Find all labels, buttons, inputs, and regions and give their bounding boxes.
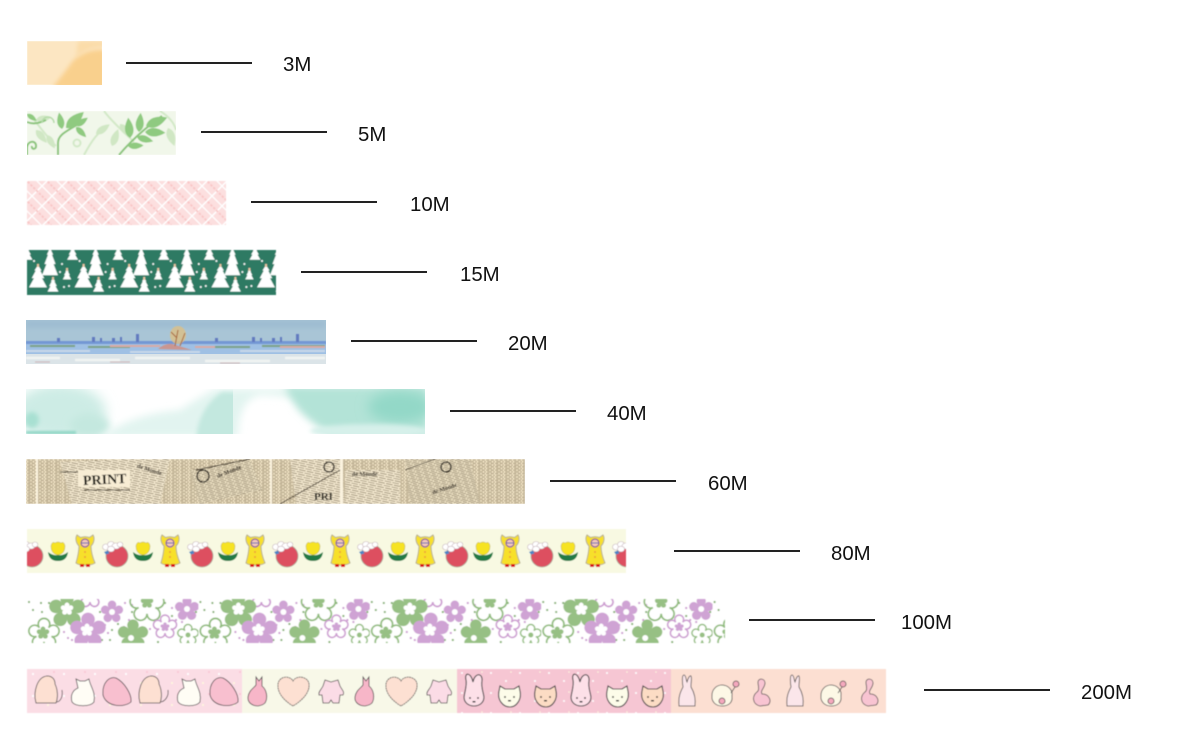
row: 100M (27, 599, 952, 643)
tape swatch: vintage newspaper (26, 459, 525, 504)
small headline: de Monde (216, 465, 242, 480)
small headline: de Monde (352, 472, 378, 478)
label: 5M: 5M (358, 124, 386, 146)
label: 100M: 100M (901, 612, 952, 634)
connector line (924, 689, 1050, 691)
small headline: PRI (314, 491, 333, 503)
small headline: de Monde (432, 483, 458, 496)
row: 80M (27, 529, 871, 573)
tape swatch: four-part animal pattern (27, 669, 886, 713)
row: 15M (27, 250, 500, 295)
label: 60M: 60M (708, 473, 748, 495)
connector line (674, 550, 800, 552)
label: 10M: 10M (410, 194, 450, 216)
label: 80M: 80M (831, 543, 871, 565)
connector line (251, 201, 377, 203)
label: 40M: 40M (607, 403, 647, 425)
connector line (351, 340, 477, 342)
tape swatch: raincoat, tomato and flower (27, 529, 626, 573)
tape swatch: green leaves (26, 108, 178, 155)
label: 200M: 200M (1081, 682, 1132, 704)
row: 20M (26, 320, 548, 364)
headline: PRINT: PRINT (83, 472, 128, 489)
row: 60M (26, 459, 748, 504)
tape swatch: impressionist river (26, 320, 326, 364)
segment: rose with rabbit and bear faces (457, 669, 671, 713)
tape swatch: orange watercolor (27, 41, 102, 85)
label: 20M: 20M (508, 333, 548, 355)
small headline: de Monde (136, 464, 163, 477)
connector line (749, 619, 875, 621)
tape swatch: teal watercolor (26, 389, 425, 434)
segment: pink with cats (27, 669, 242, 713)
row: 3M (27, 41, 311, 88)
connector line (450, 410, 576, 412)
connector line (126, 62, 252, 64)
connector line (301, 271, 427, 273)
tape swatch: green and purple flowers (27, 599, 725, 643)
tape swatch: pink plaid (27, 181, 226, 225)
segment: peach with rabbits, bears and flamingos (671, 669, 886, 713)
row: 5M (26, 108, 386, 155)
row: 10M (27, 181, 450, 225)
row: 40M (26, 389, 645, 434)
connector line (201, 131, 327, 133)
row: 200M (27, 669, 1132, 713)
label: 15M: 15M (460, 264, 500, 286)
label: 3M: 3M (283, 54, 311, 76)
tape swatch: green trees (27, 250, 276, 295)
segment: cream with hearts (242, 669, 457, 713)
connector line (550, 480, 676, 482)
